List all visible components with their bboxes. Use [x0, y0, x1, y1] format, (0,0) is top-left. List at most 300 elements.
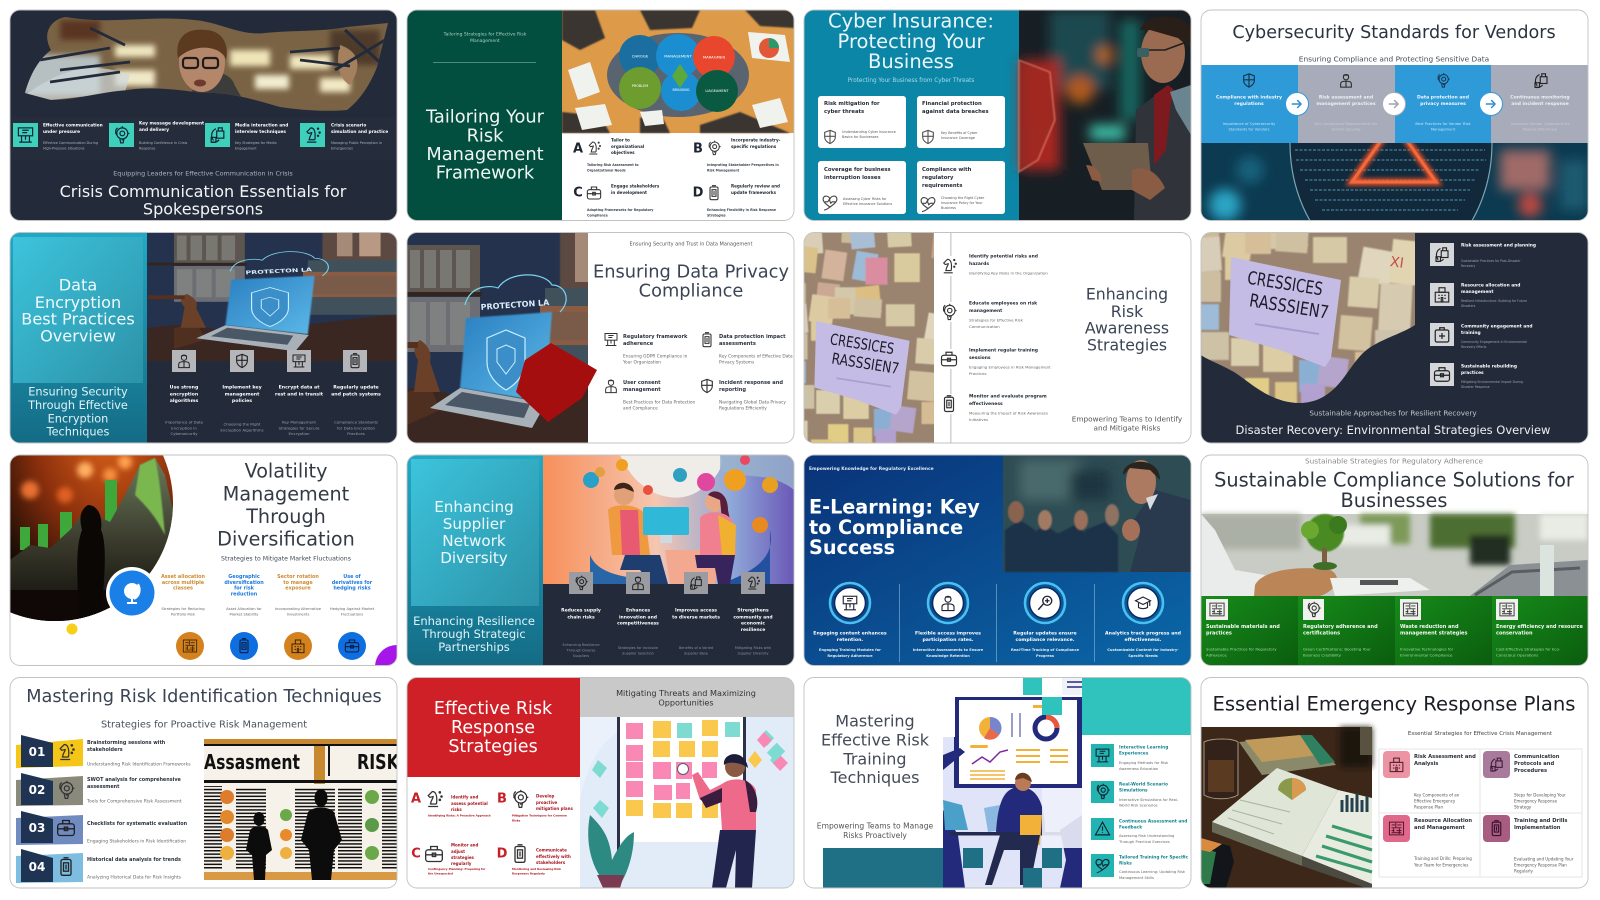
cell: risk assessment: Response Plan: [1414, 804, 1443, 809]
column 4: [1491, 65, 1588, 143]
column 3: Data protection and: [1417, 96, 1469, 100]
item: encrypt data: Encryption: [289, 430, 310, 436]
item: waste reduction: [1395, 596, 1492, 666]
item: analytics: Analytics track progress and: [1105, 632, 1181, 636]
item: regulatory framework: Your Organization: [622, 359, 661, 365]
item: media interaction: interview techniques: [235, 128, 286, 134]
cell: training and drills: Evaluating and Updating Your: [1514, 856, 1573, 862]
item: analytics: Specific Needs: [1128, 654, 1158, 658]
card: coverage: Effective Insurance Solutions: [843, 202, 892, 206]
item C: [411, 842, 486, 876]
title: Effective Risk: [821, 730, 930, 749]
item: monitor programme: Measuring the Impact of Risk Awareness: [969, 410, 1048, 416]
item: strong encryption: [165, 350, 204, 436]
item: improves access: Supplier Base: [684, 652, 708, 656]
icon row band: [13, 121, 388, 150]
item: asset allocation: Strategies for Reducing: [161, 607, 205, 611]
green title column: Management: [470, 38, 500, 44]
title: to Compliance: [809, 516, 963, 538]
subtitle: Risks Proactively: [843, 830, 907, 840]
item: sustainable materials: [1201, 596, 1298, 666]
cell: resource allocation: Resource Allocation: [1414, 818, 1472, 824]
subtitle: Equipping Leaders for Effective Communication in Crisis: [113, 170, 293, 178]
item: encrypt data: rest and in transit: [275, 391, 324, 397]
title: Strategies: [1087, 335, 1167, 354]
panel: Cyber Insurance: [804, 10, 1192, 221]
item: analytics: [1105, 583, 1181, 658]
item D: D: [693, 186, 704, 200]
item: geographic diversification: reduction: [231, 591, 258, 597]
photo: risk diagram on table: PROBLEM: [632, 84, 648, 88]
item: enhances innovation: Supplier Selection: [622, 652, 654, 656]
item: waste reduction: Waste reduction and: [1400, 624, 1459, 630]
step 03: [16, 811, 188, 845]
item: waste reduction: Environmental Compliance: [1400, 652, 1453, 657]
item: data protection impact: Key Components of Effective Data: [719, 354, 793, 360]
item: reduces risk: [561, 572, 601, 658]
eyebrow: Ensuring Security and Trust in Data Management: [630, 242, 752, 248]
photo: sticky notes wall: [777, 219, 988, 491]
item: effective communication: Effective Communication During: [43, 141, 98, 145]
item: real-world simulations: Real-World Scenario: [1119, 782, 1168, 788]
item: asset allocation: across multiple: [162, 580, 205, 586]
item B: B: [497, 792, 507, 806]
item: regular training: sessions: [969, 354, 991, 360]
green title column: Management: [426, 144, 544, 164]
step 02: 02: [29, 783, 45, 797]
item: strengthens community: community and: [733, 614, 773, 620]
blue globe badge: [106, 567, 158, 619]
item A: Identifying Risks: A Proactive Approach: [428, 814, 491, 818]
item: regulatory framework: Regulatory framework: [623, 334, 687, 340]
item A: Tailor to: [611, 138, 630, 142]
panel: Sustainable Compliance Solutions: [1201, 455, 1588, 666]
item: sector rotation: Incorporating Alternative: [275, 607, 321, 611]
title: Enhancing: [1086, 284, 1168, 304]
item: regulatory adherence: [1298, 596, 1395, 666]
item C: Contingency Planning: Preparing for: [428, 867, 486, 871]
item C: adjust: [451, 848, 465, 854]
item: media interaction: Media interaction and: [235, 124, 288, 128]
card: compliance: [917, 161, 1005, 214]
title: Cyber Insurance:: [828, 10, 994, 32]
item B: specific regulations: [731, 144, 777, 148]
item D: update frameworks: [731, 190, 777, 194]
green footer: [1201, 596, 1588, 666]
item: regular updates: Regular updates ensure: [1013, 632, 1077, 636]
photo: laptop with shield: [370, 225, 660, 465]
panel: Enhancing Supplier Network Diversity: [407, 455, 794, 666]
card: compliance: regulatory: [922, 175, 954, 181]
subtitle: Through Effective: [27, 399, 128, 412]
item: strong encryption: Cybersecurity: [170, 430, 198, 436]
cell: communication protocols: Protocols and: [1514, 761, 1554, 767]
photo: hand holding tree: [1201, 514, 1588, 596]
column 3: privacy measures: [1420, 100, 1466, 106]
item: risk assessment: Risk assessment and planning: [1461, 242, 1536, 248]
item B: Risk Management: [707, 168, 740, 172]
step 04: Historical data analysis for trends: [87, 857, 181, 863]
arrow 3: [1480, 92, 1502, 116]
item: enhances innovation: Strategies for Inclusive: [618, 646, 658, 650]
step 04: Analyzing Historical Data for Risk Insights: [87, 874, 182, 880]
item: regulatory framework: adherence: [623, 341, 654, 347]
item: regular updates: compliance relevance.: [1015, 637, 1075, 643]
item: real-world simulations: World Risk Scenarios: [1119, 804, 1158, 808]
subtitle: Partnerships: [438, 640, 510, 654]
card: compliance: Insurance Policy for Your: [941, 201, 983, 205]
item: regulatory framework: [605, 334, 688, 365]
title block: Enhancing: [434, 498, 514, 516]
title: Businesses: [1341, 488, 1447, 512]
green title column: Tailoring Your: [426, 106, 544, 128]
item: energy efficiency: Conscious Operations: [1496, 652, 1538, 657]
item: geographic diversification: Geographic: [228, 574, 260, 580]
item: strengthens community: economic: [741, 620, 765, 626]
column 3: [1395, 65, 1491, 143]
arrow 2: [1382, 92, 1406, 116]
arrow 1: [1286, 92, 1308, 116]
item: continuous assessment: Continuous Assessment and: [1119, 820, 1187, 824]
item A: organizational: [611, 144, 645, 148]
item B: Integrating Stakeholder Perspectives in: [707, 163, 779, 167]
item: effective communication: Effective communication: [43, 124, 103, 128]
subtitle: and Mitigate Risks: [1094, 423, 1161, 432]
subtitle: Sustainable Approaches for Resilient Recovery: [1309, 408, 1477, 418]
item: update and patch: Practices: [347, 430, 365, 436]
step 03: 03: [29, 821, 45, 835]
item: incident response: reporting: [719, 387, 746, 393]
title: Diversification: [217, 527, 355, 550]
item D: D: [497, 846, 508, 862]
item: regulatory adherence: Green Certifications: Boosting Your: [1303, 646, 1371, 652]
item: reduces risk: Enhancing Resilience: [562, 643, 600, 647]
cell: risk assessment: Effective Emergency: [1414, 798, 1456, 803]
item: strengthens community: [733, 572, 773, 656]
subtitle: Enhancing Resilience: [413, 614, 535, 628]
item: enhances innovation: competitiveness: [617, 620, 659, 626]
item: data protection impact: assessments: [719, 341, 756, 347]
illustration: risk assessment board: [204, 739, 400, 880]
item D: effectively with: [536, 854, 571, 858]
item: continuous assessment: Feedback: [1119, 824, 1142, 830]
photo: open report on desk: [1201, 727, 1372, 890]
red title block: [407, 677, 580, 777]
item: improves access: to diverse markets: [672, 614, 720, 620]
panel: Volatility Management Through Diversification: [0, 380, 419, 689]
item: derivatives: Use of: [343, 574, 361, 580]
item: derivatives: derivatives for: [332, 580, 373, 586]
item: regulatory adherence: Regulatory adherence and: [1303, 624, 1378, 630]
title: Business: [868, 50, 954, 72]
item: community engagement: [1430, 323, 1533, 349]
item: crisis scenario: Managing Public Perception in: [331, 141, 382, 145]
cell: training and drills: [1483, 815, 1574, 873]
item: sustainable materials: Adherence: [1206, 652, 1227, 657]
subtitle: Techniques: [46, 425, 109, 438]
step 04: 04: [29, 860, 45, 874]
photo: risk diagram on table: BRINGING: [672, 88, 690, 92]
card: risk mitigation: Understanding Cyber Insurance: [842, 130, 896, 134]
item: regular training: [939, 348, 1051, 376]
subtitle: Empowering Teams to Identify: [1072, 414, 1182, 424]
item: energy efficiency: Energy efficiency and resource: [1496, 624, 1583, 630]
yellow dot: [66, 624, 78, 634]
item: sector rotation: [275, 574, 322, 660]
title block: Best Practices: [21, 309, 135, 328]
item: resource allocation: Disasters: [1461, 304, 1476, 308]
panel: Tailoring Your Risk Management Framework: [407, 10, 794, 221]
item: resource allocation: Resource allocation and: [1461, 284, 1520, 288]
item: data protection impact: [703, 333, 793, 365]
item: educate employees: Strategies for Effective Risk: [969, 318, 1023, 322]
item: regular updates: Real-Time Tracking of Compliance: [1011, 648, 1079, 652]
item: strengthens community: Mitigating Risks with: [735, 646, 771, 650]
item: tailored training: Continuous Learning: Updating Risk: [1119, 870, 1185, 874]
item: educate employees: Communication: [969, 324, 1000, 328]
cell: resource allocation: Your Team for Emergencies: [1413, 862, 1468, 867]
card: financial protection: against data breaches: [922, 109, 989, 115]
cell: communication protocols: Communication: [1514, 754, 1559, 760]
item: monitor programme: [939, 394, 1048, 422]
item: interactive learning: Interactive Learning: [1119, 746, 1168, 750]
item: identify risks: Identifying Key Risks in the Organization: [969, 270, 1048, 276]
grey subtitle block: [580, 677, 794, 717]
item: improves access: Improves access: [675, 608, 717, 614]
item: sector rotation: to manage: [283, 580, 313, 586]
item A: Organizational Needs: [587, 168, 626, 172]
column 1: Importance of Cybersecurity: [1223, 122, 1275, 126]
item: geographic diversification: Asset Allocation for: [226, 607, 262, 611]
column 3: Best Practices for Vendor Risk: [1415, 122, 1471, 126]
photo: cyber warning triangle: [1201, 143, 1588, 220]
item: geographic diversification: Market Stability: [230, 612, 259, 616]
subtitle: Protecting Your Business from Cyber Threats: [848, 78, 974, 84]
item: real-world simulations: Interactive Simulations for Real-: [1119, 798, 1178, 802]
cell: training and drills: Implementation: [1514, 825, 1561, 831]
step 03: Checklists for systematic evaluation: [87, 821, 188, 827]
item: community engagement: training: [1461, 330, 1481, 336]
item: continuous assessment: [1091, 818, 1187, 844]
item: sustainable materials: Sustainable Practices for Regulatory: [1206, 646, 1277, 652]
item D: Strategies: [707, 214, 726, 218]
panel: Crisis Communication Essentials for Spokespersons: [10, 10, 397, 221]
eyebrow: Empowering Knowledge for Regulatory Excellence: [809, 466, 934, 472]
cell: risk assessment: Analysis: [1414, 761, 1438, 767]
item: media interaction: Key Strategies for Media: [235, 141, 277, 145]
item: update and patch: Regularly update: [333, 386, 379, 390]
card: risk mitigation: cyber threats: [824, 109, 864, 115]
item: geographic diversification: [224, 574, 264, 660]
title: Awareness: [1085, 318, 1169, 337]
subtitle: Ensuring Compliance and Protecting Sensitive Data: [1299, 54, 1489, 64]
column 1: [1201, 65, 1298, 143]
cell: resource allocation: [1383, 815, 1472, 867]
panel: Mastering Risk Identification Techniques: [10, 677, 400, 888]
green title column: [407, 10, 562, 221]
cell: training and drills: Regularly: [1514, 868, 1533, 873]
item C: Adapting Frameworks for Regulatory: [587, 208, 654, 212]
cell: communication protocols: [1483, 751, 1566, 809]
title block: Encryption: [35, 292, 121, 311]
step 02: SWOT analysis for comprehensive: [87, 777, 181, 783]
item: sustainable materials: practices: [1206, 630, 1232, 636]
item: monitor programme: effectiveness: [969, 400, 1003, 406]
item: key message: [109, 120, 204, 150]
item: enhances innovation: [617, 572, 659, 656]
item: tailored training: Risks: [1119, 860, 1132, 866]
item: real-world simulations: Simulations: [1119, 787, 1148, 793]
item: strong encryption: Use strong: [170, 386, 198, 390]
green title column: Framework: [436, 162, 535, 183]
item: user consent: Best Practices for Data Protection: [623, 400, 695, 406]
item: derivatives: Hedging Against Market: [330, 607, 374, 611]
item B: [497, 790, 573, 822]
item: sustainable rebuilding: practices: [1461, 370, 1484, 376]
item: key management: policies: [232, 398, 252, 404]
item C: the Unexpected: [428, 872, 453, 876]
card: risk mitigation: Risk mitigation for: [824, 101, 880, 107]
grid lines: [1379, 749, 1582, 877]
item: user consent: [606, 380, 696, 411]
cell: communication protocols: Emergency Response: [1514, 798, 1558, 803]
item: effective communication: [13, 122, 103, 150]
item: asset allocation: Asset allocation: [161, 574, 205, 580]
item: update and patch: [331, 350, 381, 436]
illustration: two people at desk: [543, 455, 794, 584]
panel: Effective Risk Response Strategies: [407, 677, 794, 888]
card: financial protection: Insurance Coverage: [941, 136, 975, 140]
item: identify risks: [939, 254, 1048, 276]
item: educate employees: [939, 300, 1038, 328]
item: asset allocation: Portfolio Risk: [171, 612, 196, 616]
item: key management: [220, 350, 264, 432]
item: engaging content: retention.: [837, 637, 863, 643]
item: derivatives: hedging risks: [333, 586, 371, 592]
item: update and patch: for Data Encryption: [337, 425, 376, 430]
item A: A: [411, 792, 421, 806]
illustration: risk assessment board: Assasment: [204, 750, 300, 774]
item: interactive learning: Engaging Methods for Risk: [1119, 761, 1168, 765]
item: regular updates: Progress: [1036, 654, 1054, 658]
item: strong encryption: algorithms: [170, 398, 198, 404]
subtitle: Encryption: [48, 412, 108, 425]
item D: Responses Regularly: [512, 872, 545, 876]
item: key message: Building Confidence in Crisis: [139, 141, 187, 145]
column 2: Risk assessment and: [1319, 96, 1373, 100]
card: risk mitigation: Basics for Businesses: [842, 135, 879, 139]
item: media interaction: Engagement: [235, 146, 257, 150]
item: crisis scenario: [300, 122, 388, 150]
title: Disaster Recovery: Environmental Strategies Overview: [1236, 423, 1550, 437]
item: asset allocation: classes: [173, 586, 193, 592]
photo: sticky notes wall blob: XI: [1389, 254, 1405, 272]
illustration: person at sticky board: [580, 717, 794, 888]
column 4: Posture Effectively: [1523, 128, 1558, 132]
eyebrow: Sustainable Strategies for Regulatory Adherence: [1305, 456, 1483, 466]
item: incident response: Incident response and: [719, 380, 783, 386]
title block: [13, 237, 143, 383]
item: flexible access: Interactive Assessments to Ensure: [913, 648, 983, 652]
item: waste reduction: Innovative Technologies for: [1400, 646, 1453, 652]
item: community engagement: Recovery Efforts: [1461, 345, 1487, 349]
item: engaging content: Engaging content enhances: [813, 632, 887, 636]
item: flexible access: Knowledge Retention: [926, 654, 970, 658]
item: user consent: management: [623, 387, 661, 393]
item: reduces risk: chain risks: [567, 614, 595, 620]
item: educate employees: management: [969, 308, 1003, 314]
title block: Supplier: [443, 515, 506, 533]
item B: mitigation plans: [536, 806, 573, 810]
item: resource allocation: Resilient Infrastructure: Building for Future: [1461, 299, 1527, 303]
item: key message: and delivery: [139, 126, 169, 132]
item C: [573, 184, 660, 218]
item: strengthens community: Strengthens: [737, 608, 769, 614]
item: energy efficiency: Cost-Effective Strategies for Eco-: [1496, 646, 1560, 652]
step 02: Tools for Comprehensive Risk Assessment: [86, 798, 182, 804]
item: encrypt data: [275, 350, 324, 436]
cell: resource allocation: and Management: [1414, 825, 1465, 831]
panel: Enhancing Risk Awareness Strategies: [777, 219, 1191, 491]
title block: Diversity: [440, 549, 508, 567]
item C: C: [573, 186, 583, 200]
item D: [497, 845, 571, 876]
item: incident response: Navigating Global Data Privacy: [719, 400, 786, 406]
item B: Incorporate industry-: [731, 138, 780, 142]
item D: stakeholders: [536, 860, 566, 864]
item: flexible access: [913, 583, 984, 658]
title: Training: [842, 749, 907, 768]
panel: Data Encryption Best Practices: [10, 233, 397, 442]
column 2: [1298, 65, 1395, 143]
card: coverage: Coverage for business: [824, 167, 891, 173]
item: tailored training: [1091, 854, 1189, 880]
subtitle: Empowering Teams to Manage: [817, 822, 933, 830]
item A: assess potential: [451, 800, 488, 806]
card: compliance: requirements: [922, 183, 962, 189]
item: analytics: Customizable Content for Industry-: [1107, 648, 1179, 652]
item: encrypt data: Key Management: [282, 420, 316, 424]
title: Mastering Risk Identification Techniques: [26, 687, 382, 707]
item: regular updates: [1011, 583, 1080, 658]
item: user consent: User consent: [623, 380, 661, 386]
item: sustainable rebuilding: Mitigating Environmental Impact During: [1461, 380, 1523, 384]
title: E-Learning: Key: [809, 496, 980, 518]
item: continuous assessment: Through Practical Exercises: [1118, 840, 1170, 844]
cell: communication protocols: Procedures: [1514, 768, 1547, 774]
title: Crisis Communication Essentials for: [60, 182, 346, 201]
item: educate employees: Educate employees on risk: [969, 302, 1037, 306]
title: Spokespersons: [143, 199, 263, 218]
item: reduces risk: Through Diverse: [566, 648, 595, 652]
item: improves access: Benefits of a Varied: [679, 646, 713, 650]
step 01: [16, 735, 191, 768]
item C: in development: [611, 190, 647, 194]
teal corner: [1082, 677, 1191, 735]
green title column: Tailoring Strategies for Effective Risk: [444, 32, 526, 38]
red title block: Response: [451, 718, 535, 738]
item: energy efficiency: [1492, 596, 1588, 666]
column 1: Standards for Vendors: [1228, 128, 1270, 132]
panel: Cybersecurity Standards for Vendors: [1201, 24, 1588, 220]
item: sector rotation: exposure: [285, 586, 311, 592]
column 4: Assessing Vendor Cybersecurity: [1510, 122, 1570, 126]
item: engaging content: Regulatory Adherence: [827, 654, 873, 658]
item A: risks: [451, 806, 462, 812]
subtitle: Strategies for Proactive Risk Management: [101, 720, 307, 730]
panel: Disaster Recovery: [1185, 136, 1588, 457]
cell: risk assessment: Risk Assessment and: [1414, 754, 1476, 760]
